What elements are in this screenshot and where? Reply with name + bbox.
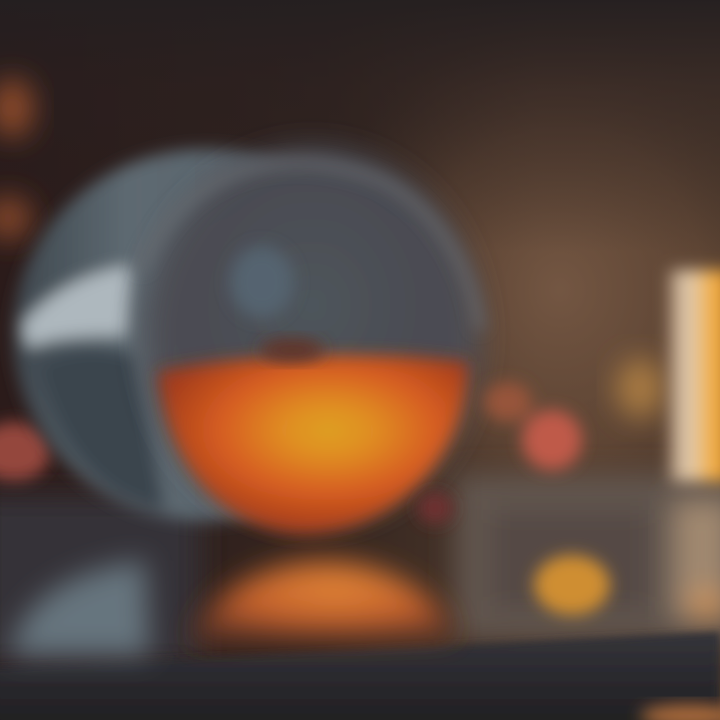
table surface (0, 632, 720, 720)
counter items lower left (0, 495, 200, 665)
right bright panel (670, 270, 720, 482)
right table glassware (455, 475, 720, 640)
small orange in glass (534, 555, 610, 615)
background amber light (616, 358, 664, 418)
orange bowl (158, 355, 468, 534)
right lower panel (672, 500, 720, 621)
left background orange lights (0, 78, 34, 240)
left red fruit (0, 422, 50, 482)
metal reflection (10, 560, 150, 655)
bottom right glow (640, 704, 720, 720)
small red fruits (417, 382, 582, 524)
sphere rim (13, 149, 397, 521)
sphere glass body (144, 147, 480, 523)
stem shadow (260, 338, 324, 362)
metal sphere (13, 147, 480, 534)
sphere upper outline and blue reflection (140, 163, 480, 330)
orange reflection (190, 560, 455, 640)
